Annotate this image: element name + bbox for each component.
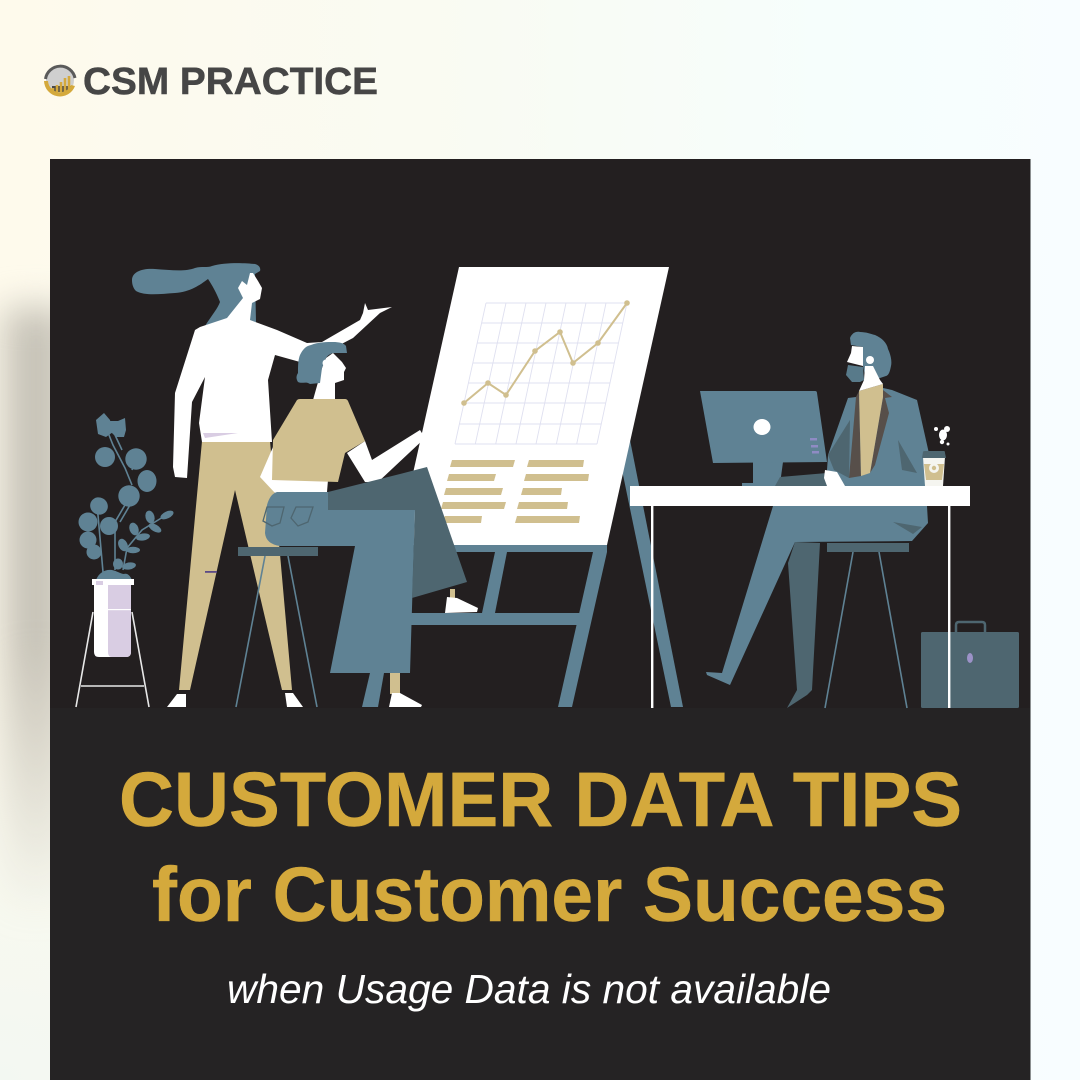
seated woman hair — [296, 342, 347, 384]
plant on stand — [76, 413, 175, 707]
seated woman skirt fold — [328, 467, 467, 598]
heels — [167, 693, 303, 707]
man's beard — [846, 365, 864, 382]
thigh shadow — [893, 522, 922, 534]
easel — [362, 267, 683, 707]
logo: CSM Practice — [44, 61, 378, 103]
panel shadow — [4, 308, 68, 918]
man's face — [847, 346, 863, 366]
standing woman hair — [132, 263, 260, 326]
seated woman trousers — [265, 492, 415, 673]
seated woman — [236, 342, 478, 707]
board — [397, 267, 669, 545]
man's neck and ear — [859, 356, 883, 391]
standing woman — [132, 263, 392, 707]
logo wordmark: CSM PRACTICE — [83, 61, 378, 103]
title line one: CUSTOMER DATA TIPS — [119, 757, 962, 843]
shirt hem shadow — [203, 433, 238, 438]
line chart — [455, 300, 630, 444]
trouser mark — [205, 571, 217, 573]
monitor logo — [754, 419, 770, 435]
seated woman neck and face — [313, 353, 346, 400]
seated man at desk — [630, 332, 1019, 708]
man's hair — [850, 332, 891, 380]
icon: plant pot — [92, 579, 134, 657]
man's jacket — [827, 388, 930, 486]
chart grid — [455, 303, 627, 444]
panel: dark card — [50, 159, 1031, 1080]
title line two: for Customer Success — [152, 852, 947, 938]
man's front leg — [706, 506, 928, 685]
standing woman trousers — [179, 441, 292, 690]
keyboard — [775, 473, 833, 486]
jacket shading — [828, 420, 917, 478]
text placeholder bars — [440, 460, 589, 523]
icon: plant leaves — [78, 413, 175, 580]
shoes — [389, 589, 478, 707]
man's back leg — [787, 542, 820, 708]
stool — [236, 547, 318, 707]
easel legs — [362, 440, 683, 707]
pockets — [263, 507, 313, 526]
man's stool — [825, 543, 909, 708]
chart line — [461, 300, 630, 406]
icon: logo gauge with bars — [44, 66, 75, 96]
icon: plant stand — [76, 612, 149, 707]
monitor buttons — [810, 438, 819, 454]
man's shirt and lapels — [849, 384, 892, 478]
steam — [934, 426, 950, 446]
seated woman shirt — [272, 399, 365, 482]
title — [119, 757, 962, 938]
man's hand — [824, 470, 845, 486]
subtitle: when Usage Data is not available — [227, 966, 831, 1012]
seated woman ear — [322, 360, 330, 366]
desk — [630, 486, 970, 708]
illustration: team reviewing chart — [76, 263, 1019, 708]
monitor — [700, 391, 827, 487]
seated woman arms — [260, 430, 425, 493]
coffee cup with steam — [922, 426, 950, 486]
standing woman top and arms — [173, 273, 392, 478]
briefcase — [921, 622, 1019, 708]
